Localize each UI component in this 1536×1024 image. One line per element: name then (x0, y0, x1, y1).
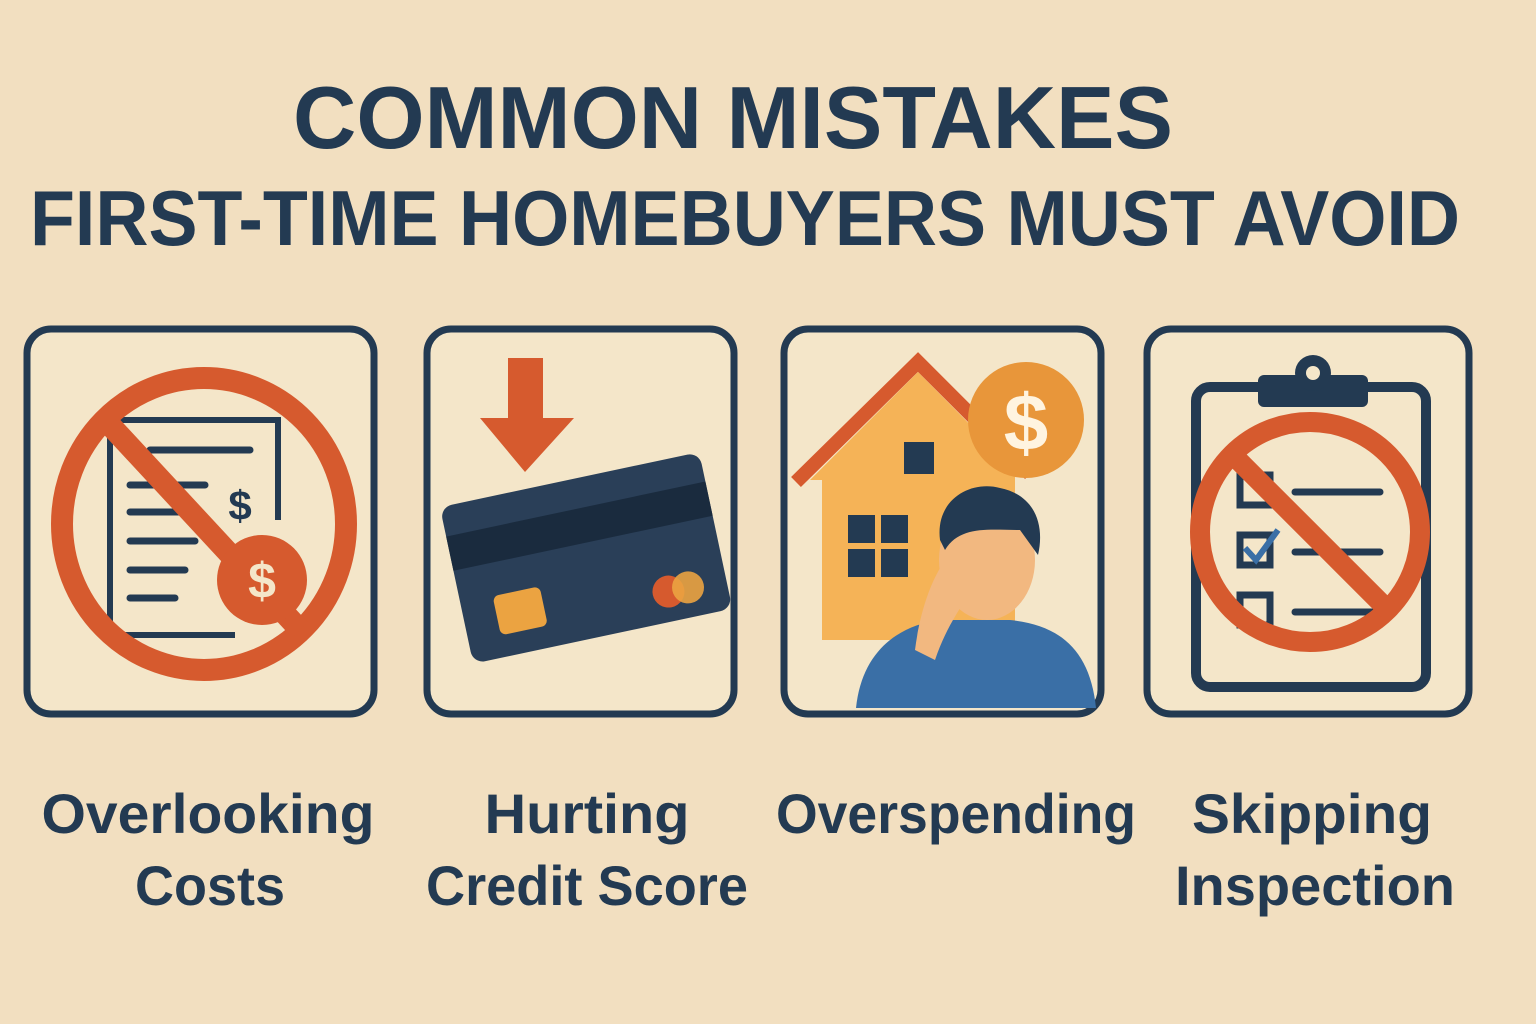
panel: skipping inspection (1147, 329, 1469, 714)
icon: house (796, 362, 1030, 640)
label: hurting credit score: Hurting (484, 782, 690, 845)
label: hurting credit score (426, 782, 748, 917)
panel: overspending (784, 329, 1101, 714)
title (30, 68, 1460, 262)
icon: prohibition sign (62, 378, 346, 670)
label: skipping inspection (1175, 782, 1455, 917)
panel: overlooking costs (27, 329, 374, 714)
label: overlooking costs (42, 782, 374, 917)
icon: document: $ (228, 482, 252, 529)
icon: frustrated person (856, 486, 1096, 708)
icon: prohibition sign (1200, 422, 1420, 642)
label: overlooking costs: Costs (135, 854, 285, 917)
title: FIRST-TIME HOMEBUYERS MUST AVOID (30, 174, 1460, 262)
panel: hurting credit score (427, 329, 734, 714)
icon: prohibition sign: $ (248, 553, 276, 609)
icon: dollar coin: $ (1004, 378, 1048, 467)
label: overlooking costs: Overlooking (42, 782, 374, 845)
icon: credit card (440, 452, 732, 664)
label: overspending: Overspending (776, 782, 1136, 845)
icon: down arrow (480, 358, 574, 472)
icon: document (110, 420, 278, 635)
label: hurting credit score: Credit Score (426, 854, 748, 917)
icon: dollar coin (968, 362, 1084, 478)
label: skipping inspection: Skipping (1192, 782, 1432, 845)
title: COMMON MISTAKES (293, 68, 1173, 167)
label: skipping inspection: Inspection (1175, 854, 1455, 917)
icon: clipboard (1196, 355, 1426, 687)
